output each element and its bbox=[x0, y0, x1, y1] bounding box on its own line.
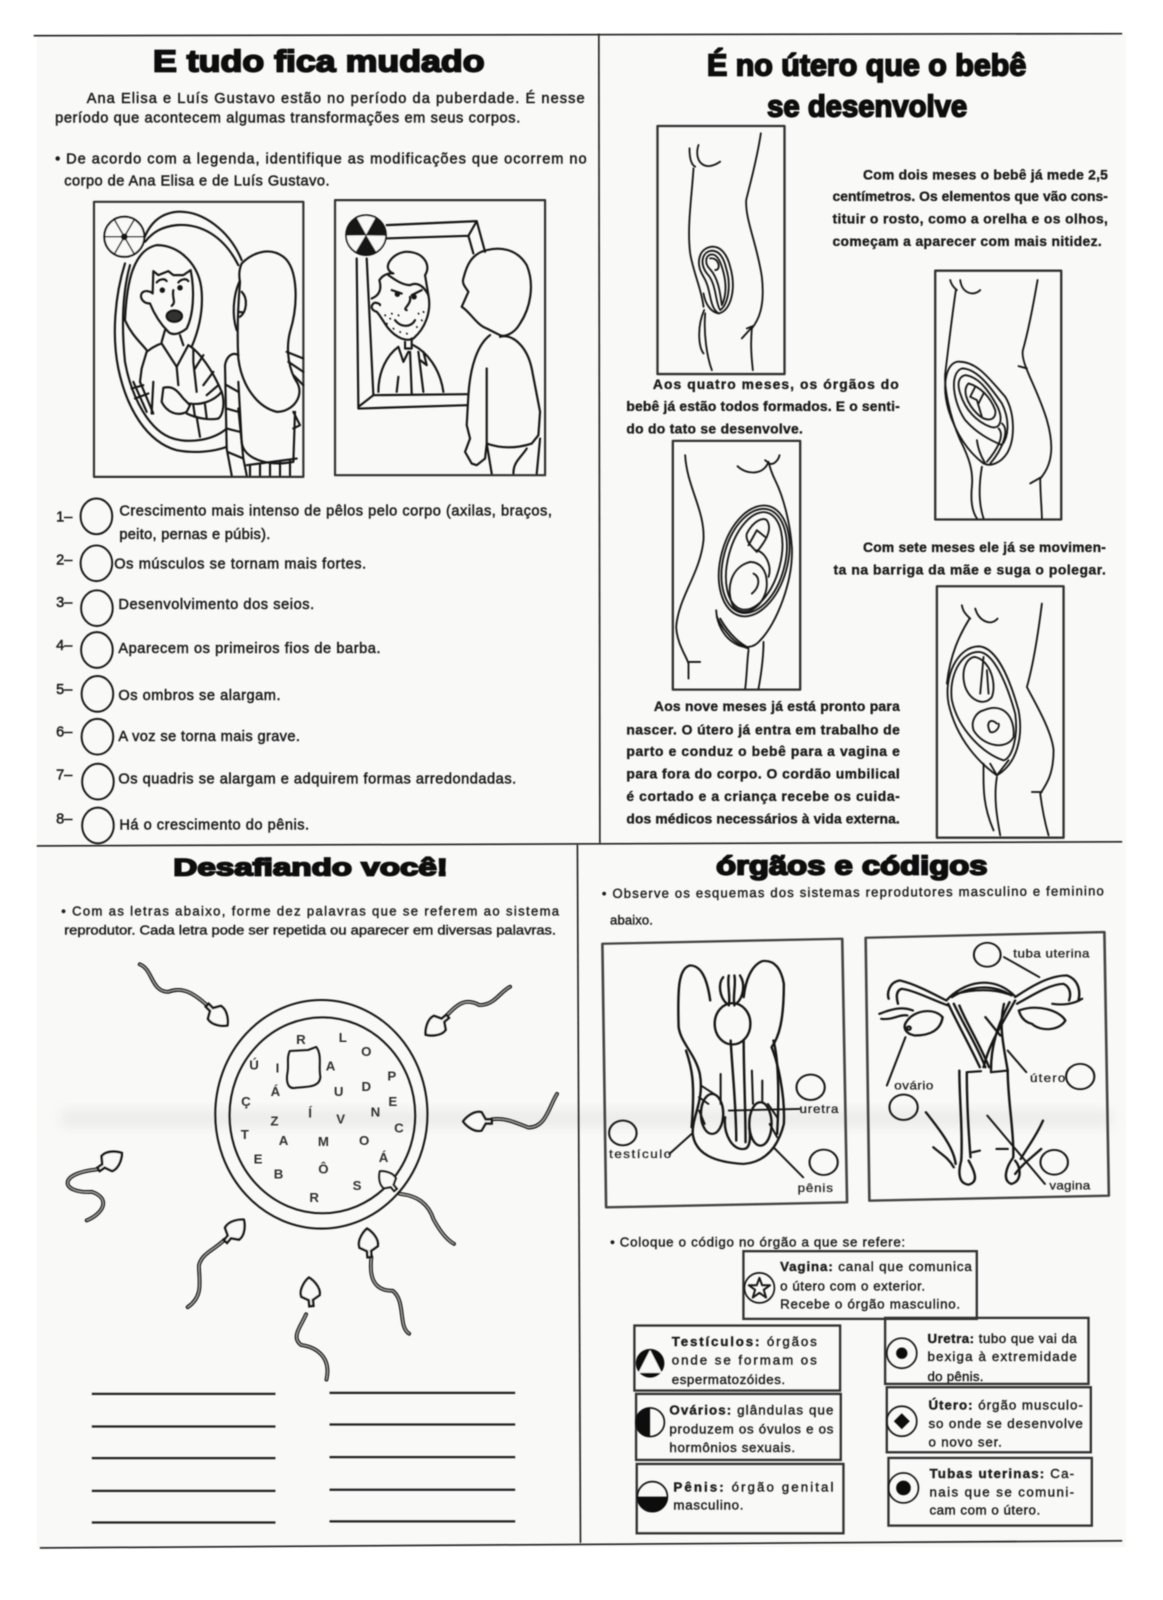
code: uretra: bexiga à extremidade bbox=[927, 1349, 1077, 1364]
instruction text: corpo de Ana Elisa e de Luís Gustavo. bbox=[64, 174, 330, 190]
numbered list of changes bbox=[56, 498, 552, 843]
egg cell with letters: L bbox=[339, 1030, 347, 1045]
code: útero bbox=[887, 1387, 1091, 1452]
egg cell with letters: R bbox=[296, 1032, 306, 1047]
code: ovários: produzem os óvulos e os bbox=[669, 1421, 834, 1436]
diagram: female reproductive system bbox=[866, 932, 1109, 1201]
text: seven months: ta na barriga da mãe e suga o polegar. bbox=[833, 561, 1106, 577]
egg cell with letters: Ç bbox=[241, 1094, 251, 1109]
title: se desenvolve bbox=[767, 89, 967, 123]
intro text: período que acontecem algumas transformações em seus corpos. bbox=[55, 110, 520, 126]
instruction bbox=[602, 883, 1104, 927]
item 4 bbox=[56, 632, 381, 668]
code: testículos: onde se formam os bbox=[672, 1353, 817, 1368]
egg cell with letters: Ú bbox=[249, 1057, 259, 1072]
item 6 bbox=[56, 719, 300, 755]
item 7: Os quadris se alargam e adquirem formas arredondadas. bbox=[118, 772, 516, 788]
diagram: male reproductive system: pênis bbox=[798, 1181, 833, 1195]
text: nine months: dos médicos necessários à vida externa. bbox=[626, 810, 900, 826]
text: nine months: nascer. O útero já entra em trabalho de bbox=[626, 722, 900, 738]
code: testículos: Testículos: órgãos bbox=[672, 1334, 817, 1349]
instructions: reprodutor. Cada letra pode ser repetida ou aparecer em diversas palavras. bbox=[64, 923, 556, 938]
panel: órgãos e códigos bbox=[602, 852, 1109, 1533]
egg cell with letters: U bbox=[334, 1084, 343, 1099]
diagram: female reproductive system: vagina bbox=[1049, 1178, 1091, 1192]
code: testículos: espermatozóides. bbox=[672, 1372, 785, 1387]
text: four months: do do tato se desenvolve. bbox=[626, 421, 803, 437]
diagram: female reproductive system: tuba uterina bbox=[1013, 946, 1090, 961]
title: Desafiando você! bbox=[173, 855, 448, 882]
text: two months bbox=[832, 167, 1108, 249]
diagram: male reproductive system bbox=[602, 939, 847, 1207]
code: uretra: Uretra: tubo que vai da bbox=[927, 1331, 1077, 1346]
egg cell with letters: A bbox=[279, 1133, 289, 1148]
item 8 bbox=[56, 808, 309, 843]
item 3: Desenvolvimento dos seios. bbox=[118, 597, 314, 613]
text: seven months bbox=[833, 539, 1106, 577]
code: ovários bbox=[636, 1394, 841, 1460]
title bbox=[707, 48, 1026, 123]
diagram: male reproductive system: testículo bbox=[609, 1147, 671, 1161]
text: seven months: Com sete meses ele já se movimen- bbox=[863, 539, 1106, 555]
code: pênis bbox=[637, 1464, 843, 1533]
egg cell with letters: Á bbox=[379, 1150, 389, 1165]
code: vagina: o útero com o exterior. bbox=[780, 1279, 925, 1294]
egg cell with letters: O bbox=[361, 1044, 371, 1059]
item 6: 6– bbox=[56, 725, 73, 741]
item 2 bbox=[56, 545, 366, 581]
instruction: • Coloque o código no órgão a que se refere: bbox=[610, 1235, 905, 1250]
egg cell with letters: P bbox=[387, 1069, 396, 1084]
text: four months bbox=[626, 376, 900, 437]
diagram: female reproductive system: útero bbox=[1030, 1071, 1065, 1085]
egg cell with letters: R bbox=[309, 1190, 319, 1205]
sperm cells bbox=[68, 964, 557, 1380]
text: two months: centímetros. Os elementos que vão cons- bbox=[832, 188, 1108, 204]
item 8: 8– bbox=[56, 811, 73, 827]
item 1: Crescimento mais intenso de pêlos pelo corpo (axilas, braços, bbox=[119, 503, 552, 519]
item 5 bbox=[56, 676, 281, 712]
egg cell with letters: V bbox=[336, 1111, 345, 1126]
instruction: abaixo. bbox=[610, 912, 653, 927]
text: nine months: parto e conduz o bebê para a vagina e bbox=[626, 743, 900, 759]
illustration: two months bbox=[657, 126, 785, 374]
egg cell with letters: E bbox=[254, 1151, 263, 1166]
title: É no útero que o bebê bbox=[707, 48, 1026, 83]
code: uretra bbox=[885, 1318, 1088, 1384]
instructions bbox=[61, 903, 560, 938]
item 1 bbox=[56, 498, 552, 543]
item 8: Há o crescimento do pênis. bbox=[119, 818, 309, 834]
egg cell with letters: M bbox=[318, 1134, 329, 1149]
egg cell with letters: T bbox=[241, 1127, 249, 1142]
code legend bbox=[610, 1235, 1092, 1533]
item 3 bbox=[56, 590, 314, 626]
text: two months: Com dois meses o bebê já mede 2,5 bbox=[863, 167, 1108, 183]
code: testículos bbox=[634, 1326, 840, 1391]
code: tubas uterinas: Tubas uterinas: Ca- bbox=[929, 1466, 1074, 1481]
intro text: Ana Elisa e Luís Gustavo estão no período da puberdade. É nesse bbox=[87, 90, 585, 107]
panel: É no útero que o bebê se desenvolve bbox=[626, 48, 1108, 838]
code: ovários: hormônios sexuais. bbox=[669, 1440, 795, 1455]
egg cell with letters: O bbox=[359, 1133, 369, 1148]
text: two months: tituir o rosto, como a orelha e os olhos, bbox=[832, 210, 1108, 226]
item 5: Os ombros se alargam. bbox=[118, 688, 281, 704]
egg cell with letters: N bbox=[371, 1104, 380, 1119]
illustration: nine months bbox=[937, 586, 1064, 838]
diagram: male reproductive system: uretra bbox=[799, 1102, 839, 1116]
panel: Desafiando você! bbox=[61, 855, 560, 1522]
egg cell with letters: I bbox=[276, 1060, 279, 1075]
code: tubas uterinas: nais que se comuni- bbox=[929, 1484, 1074, 1499]
text: nine months bbox=[626, 698, 900, 826]
instruction text: • De acordo com a legenda, identifique as modificações que ocorrem no bbox=[55, 151, 587, 167]
egg cell with letters: Á bbox=[271, 1084, 281, 1099]
answer lines bbox=[92, 1393, 515, 1522]
code: útero: Útero: órgão musculo- bbox=[928, 1398, 1083, 1413]
text: four months: Aos quatro meses, os órgãos do bbox=[653, 376, 899, 392]
egg cell with letters: A bbox=[326, 1058, 336, 1073]
diagram: female reproductive system: ovário bbox=[894, 1078, 933, 1092]
text: four months: bebê já estão todos formados. E o senti- bbox=[626, 398, 900, 414]
item 1: peito, pernas e púbis). bbox=[119, 527, 270, 543]
item 6: A voz se torna mais grave. bbox=[118, 729, 300, 745]
illustration: Luís Gustavo at the mirror bbox=[335, 200, 545, 475]
panel: E tudo fica mudado bbox=[55, 44, 587, 843]
illustration: seven months bbox=[673, 441, 801, 690]
intro text bbox=[55, 90, 585, 126]
item 7: 7– bbox=[56, 768, 73, 784]
code: vagina: Recebe o órgão masculino. bbox=[780, 1297, 960, 1312]
egg cell with letters: Ô bbox=[318, 1161, 329, 1176]
instruction text bbox=[55, 151, 587, 190]
egg cell with letters: S bbox=[353, 1178, 362, 1193]
item 4: Aparecem os primeiros fios de barba. bbox=[118, 641, 381, 657]
egg cell with letters bbox=[215, 1000, 427, 1229]
egg cell with letters: C bbox=[394, 1121, 404, 1136]
text: nine months: para fora do corpo. O cordão umbilical bbox=[626, 766, 900, 782]
item 2: Os músculos se tornam mais fortes. bbox=[114, 556, 366, 572]
item 1: 1– bbox=[56, 509, 73, 525]
item 4: 4– bbox=[56, 638, 73, 654]
code: vagina: Vagina: canal que comunica bbox=[780, 1259, 972, 1274]
title: órgãos e códigos bbox=[716, 852, 988, 880]
code: útero: so onde se desenvolve bbox=[928, 1416, 1083, 1431]
code: pênis: masculino. bbox=[673, 1498, 743, 1513]
code: útero: o novo ser. bbox=[928, 1434, 1002, 1449]
item 2: 2– bbox=[56, 552, 73, 568]
item 5: 5– bbox=[56, 682, 73, 698]
title: E tudo fica mudado bbox=[153, 44, 485, 78]
code: vagina bbox=[743, 1251, 977, 1319]
instructions: • Com as letras abaixo, forme dez palavras que se referem ao sistema bbox=[61, 903, 560, 918]
egg cell with letters: D bbox=[361, 1079, 371, 1094]
text: two months: começam a aparecer com mais nitidez. bbox=[832, 233, 1102, 249]
code: uretra: do pênis. bbox=[927, 1369, 983, 1384]
egg cell with letters: E bbox=[388, 1094, 397, 1109]
egg cell with letters: Z bbox=[270, 1114, 278, 1129]
text: nine months: é cortado e a criança recebe os cuida- bbox=[626, 788, 900, 804]
code: ovários: Ovários: glândulas que bbox=[669, 1403, 833, 1418]
illustration: Ana Elisa at the mirror bbox=[94, 202, 303, 477]
item 7 bbox=[56, 764, 516, 799]
egg cell with letters: B bbox=[274, 1167, 283, 1182]
code: tubas uterinas: cam com o útero. bbox=[929, 1503, 1040, 1518]
egg cell with letters: Í bbox=[308, 1105, 312, 1120]
code: pênis: Pênis: órgão genital bbox=[673, 1479, 833, 1494]
text: nine months: Aos nove meses já está pronto para bbox=[654, 698, 900, 714]
code: tubas uterinas bbox=[888, 1458, 1092, 1526]
instruction: • Observe os esquemas dos sistemas reprodutores masculino e feminino bbox=[602, 883, 1104, 901]
item 3: 3– bbox=[56, 595, 73, 611]
illustration: four months bbox=[935, 271, 1061, 519]
